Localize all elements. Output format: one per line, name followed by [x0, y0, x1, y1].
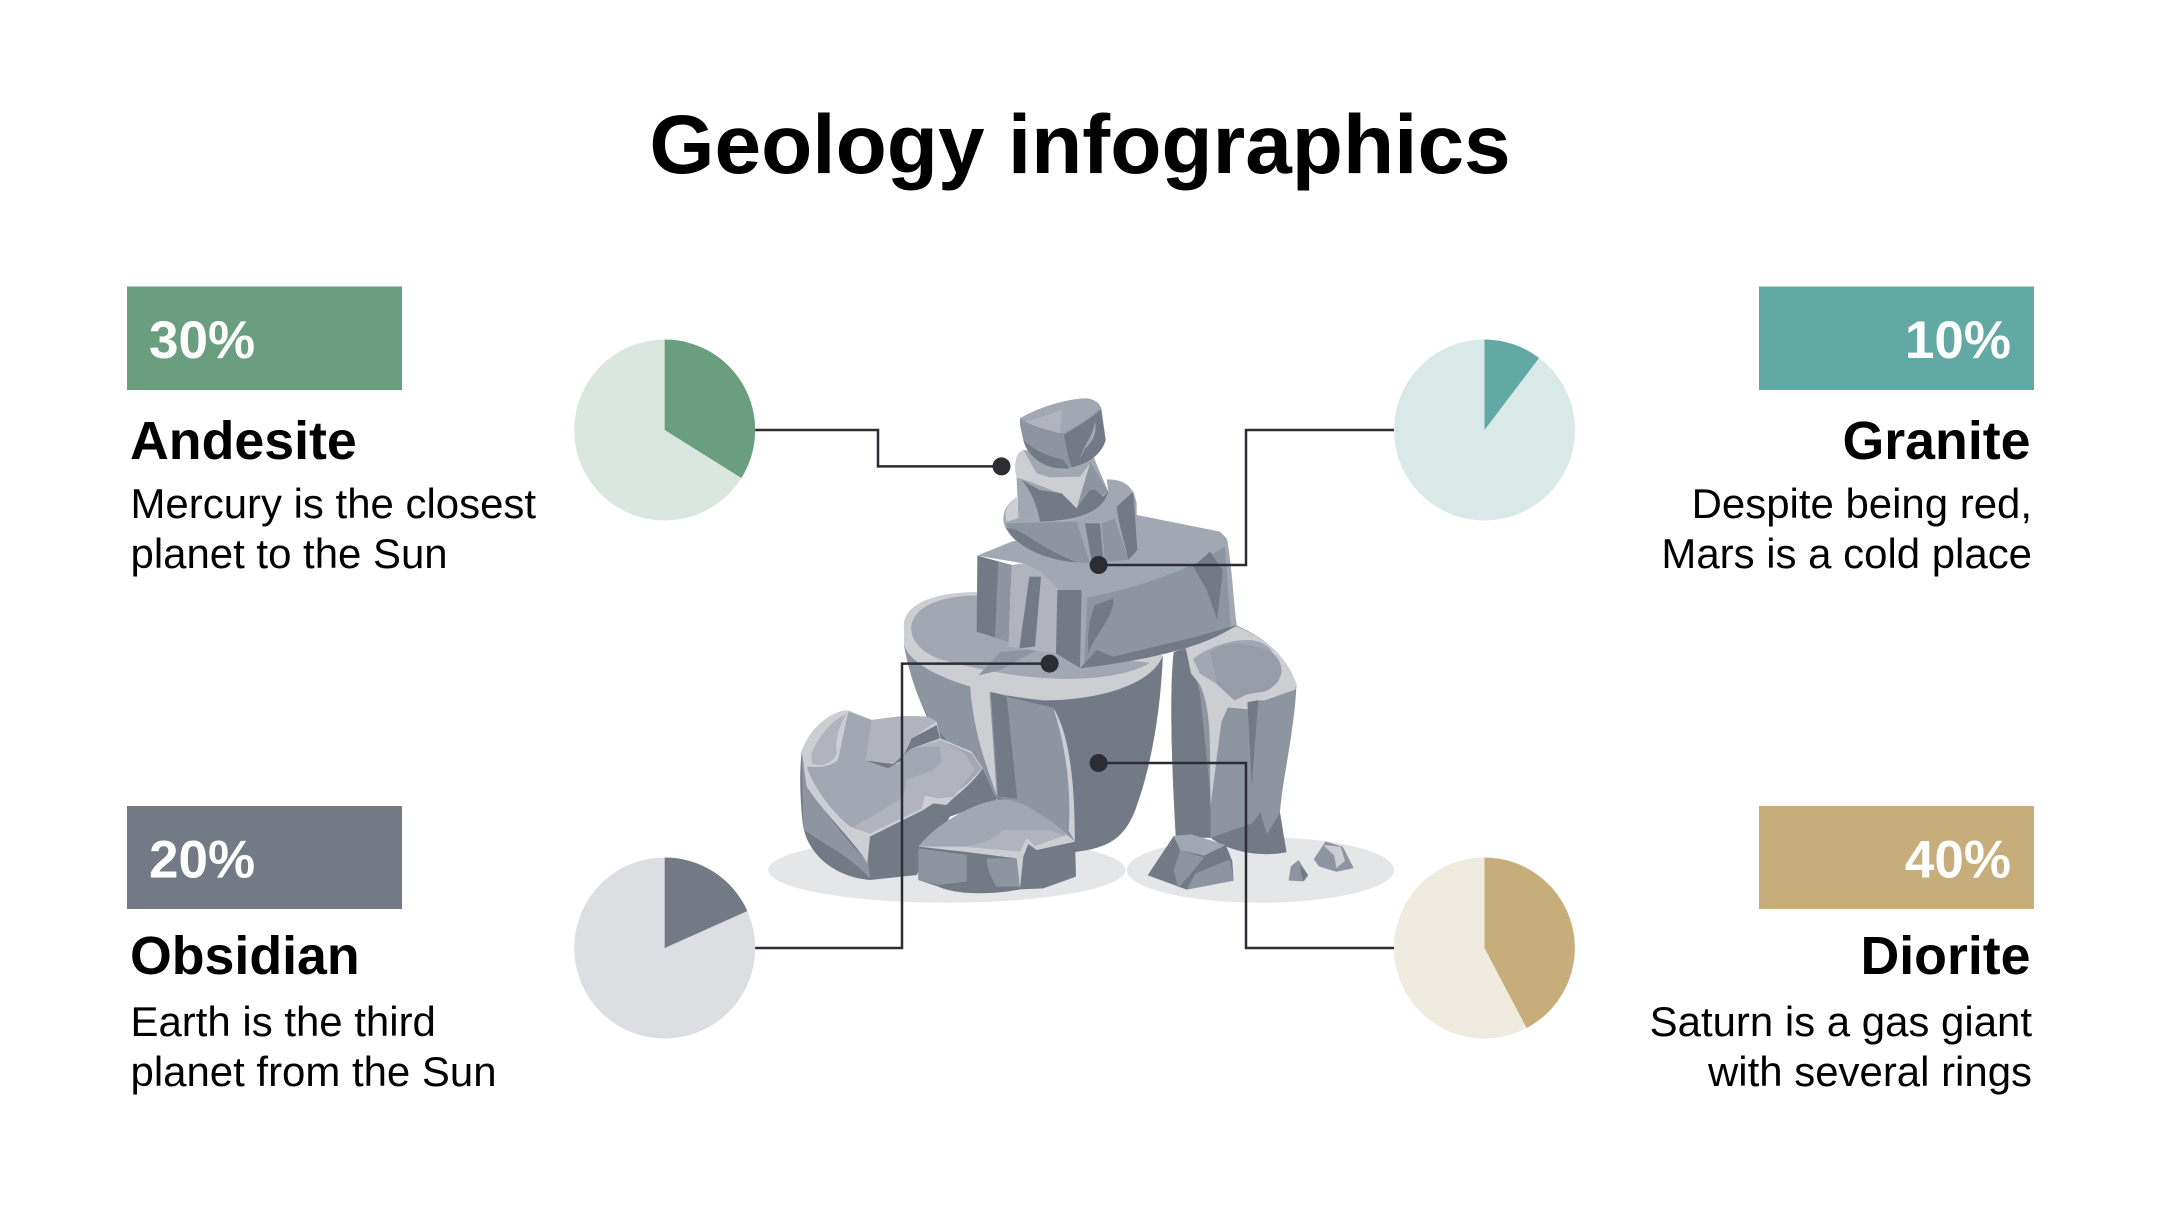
description	[1661, 480, 2032, 577]
front rock	[918, 799, 1076, 893]
percentage badge	[127, 806, 402, 909]
percentage badge	[1759, 806, 2034, 909]
central rock	[904, 592, 1163, 852]
line: Diorite	[1099, 763, 1394, 948]
ground shadows	[768, 837, 1394, 903]
percentage badge: 10%	[1905, 311, 2011, 370]
percentage badge: 40%	[1905, 830, 2011, 890]
description: Mars is a cold place	[1661, 530, 2032, 577]
pie: Diorite	[1394, 858, 1575, 1038]
line: Andesite	[755, 430, 1001, 466]
heading: Andesite	[130, 411, 357, 471]
connector dots	[992, 457, 1108, 772]
description	[130, 480, 536, 577]
description: Despite being red,	[1692, 480, 2032, 527]
pie: Andesite	[574, 340, 755, 520]
small front stone	[1148, 834, 1234, 890]
title: Geology infographics	[649, 97, 1511, 191]
panel: Obsidian	[127, 806, 497, 1095]
heading: Granite	[1843, 411, 2030, 471]
percentage badge	[1759, 286, 2034, 390]
pie: Obsidian	[574, 857, 755, 1038]
heading: Obsidian	[130, 926, 360, 986]
rock illustration	[768, 398, 1394, 903]
middle block	[977, 515, 1237, 668]
description: planet from the Sun	[130, 1048, 497, 1095]
pebbles	[1289, 841, 1354, 881]
percentage badge: 30%	[149, 311, 255, 370]
line: Obsidian	[755, 664, 1050, 948]
connector lines	[755, 430, 1394, 948]
percentage badge: 20%	[149, 830, 255, 890]
description: Saturn is a gas giant	[1650, 998, 2032, 1045]
description: Mercury is the closest	[130, 480, 536, 527]
percentage badge	[127, 286, 402, 390]
description	[130, 998, 497, 1095]
panel: Diorite	[1650, 806, 2034, 1095]
stacked stones	[1003, 398, 1137, 563]
right pillar	[1171, 625, 1296, 854]
description: planet to the Sun	[130, 530, 448, 577]
panel: Andesite	[127, 286, 536, 577]
panel: Granite	[1661, 286, 2034, 577]
left boulder	[800, 711, 997, 880]
heading: Diorite	[1860, 926, 2030, 986]
pie: Granite	[1394, 340, 1575, 520]
line: Granite	[1099, 430, 1394, 565]
description: Earth is the third	[130, 998, 436, 1045]
description	[1650, 998, 2032, 1095]
description: with several rings	[1707, 1048, 2032, 1095]
